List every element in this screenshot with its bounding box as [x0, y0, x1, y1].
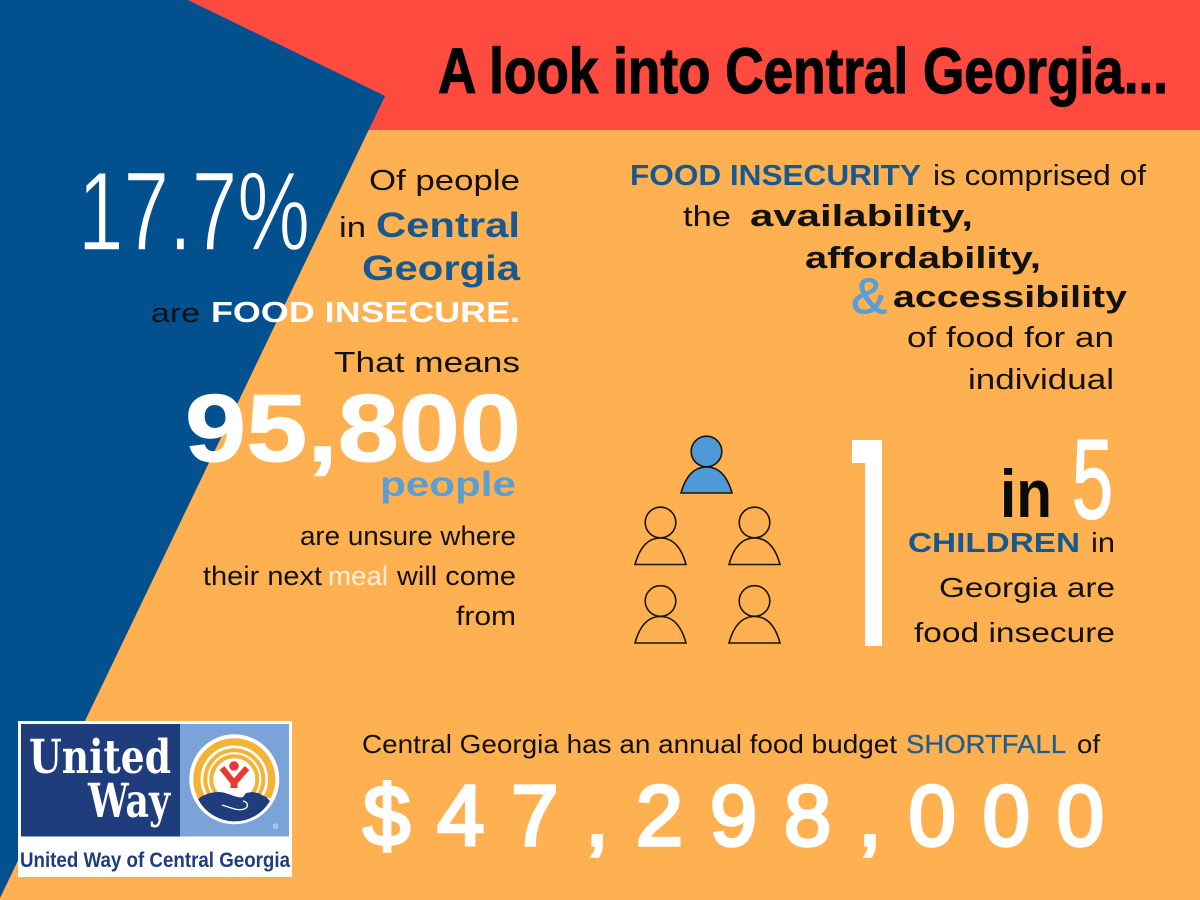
text: shortfall sentence: of: [1077, 729, 1101, 759]
text: are food insecure: FOOD INSECURE.: [211, 297, 520, 329]
logo wordmark: Way: [87, 774, 171, 829]
logo caption: United Way of Central Georgia: [20, 849, 290, 872]
emblem hand: [198, 792, 270, 821]
text: of people: Of people: [369, 165, 520, 197]
text: shortfall sentence: SHORTFALL: [906, 729, 1066, 759]
text: unsure where next meal: their next: [203, 561, 323, 591]
text: unsure where next meal: are unsure where: [300, 521, 516, 551]
text: that means: That means: [334, 347, 520, 379]
text: shortfall sentence: [362, 729, 1101, 759]
registered mark: ®: [273, 823, 279, 831]
logo: United Way of Central Georgia: [18, 721, 292, 877]
text: unsure where next meal: [203, 521, 516, 631]
logo light panel: [180, 724, 289, 836]
text: children in georgia: Georgia are: [939, 572, 1115, 603]
icon: person: [729, 507, 780, 564]
text: in: in: [1000, 456, 1052, 532]
text: are food insecure: [151, 297, 520, 329]
big numeral five: 5: [1072, 417, 1113, 542]
text: food insecurity heading: [630, 160, 1147, 192]
text: in Central Georgia: [339, 206, 521, 288]
text: children in georgia: in: [1091, 527, 1115, 558]
text: children in georgia: CHILDREN: [908, 527, 1080, 558]
text: are food insecure: are: [151, 298, 200, 328]
text: unsure where next meal: from: [456, 601, 516, 631]
panel: budget shortfall: [362, 729, 1104, 864]
text: availability: the: [683, 201, 731, 233]
logo dark panel: [21, 724, 180, 836]
text: availability: availability,: [750, 198, 973, 233]
text: of food for an individual: individual: [968, 364, 1114, 396]
text: of food for an individual: [907, 322, 1114, 396]
ampersand: &: [851, 268, 887, 324]
logo background: [18, 721, 292, 877]
text: accessibility: accessibility: [893, 279, 1128, 314]
emblem figure: [222, 761, 247, 788]
icon: highlighted person: [681, 436, 732, 493]
text: shortfall sentence: Central Georgia has an annual food budget: [362, 729, 898, 759]
icon: person: [729, 586, 780, 643]
icon group: five people: [635, 436, 780, 643]
big dollar amount: $47,298,000: [363, 769, 1104, 864]
text: unsure where next meal: will come: [396, 561, 516, 591]
logo emblem: [189, 734, 279, 831]
text: in Central Georgia: in: [339, 212, 366, 244]
text: of food for an individual: of food for an: [907, 322, 1114, 354]
text: food insecurity heading: FOOD INSECURITY: [630, 160, 921, 192]
panel: 1 in 5 children: 1: [840, 374, 902, 710]
logo wordmark: [29, 730, 171, 829]
text: children in georgia: food insecure: [914, 617, 1115, 648]
logo wordmark: United: [29, 730, 171, 785]
blue diagonal panel: [0, 0, 385, 898]
text: food insecurity heading: is comprised of: [933, 160, 1147, 192]
big number: 95,800: [185, 375, 521, 482]
text: in Central Georgia: Central: [376, 206, 520, 245]
emblem rainbow arcs: [193, 738, 276, 798]
panel: 1 in 5 children: [852, 440, 1114, 646]
text: affordability: affordability,: [805, 240, 1041, 275]
icon: person: [635, 586, 686, 643]
text: in Central Georgia: Georgia: [362, 249, 521, 288]
panel: food insecure statistic: [78, 149, 521, 631]
text: availability: [683, 198, 973, 233]
red header band: [0, 0, 1200, 130]
big percentage: 17.7%: [78, 149, 310, 274]
text: children in georgia: [908, 527, 1115, 648]
panel: food insecurity definition: [630, 160, 1147, 396]
text: unsure where next meal: meal: [328, 561, 388, 591]
icon: person: [635, 507, 686, 564]
text: people: people: [380, 465, 516, 504]
